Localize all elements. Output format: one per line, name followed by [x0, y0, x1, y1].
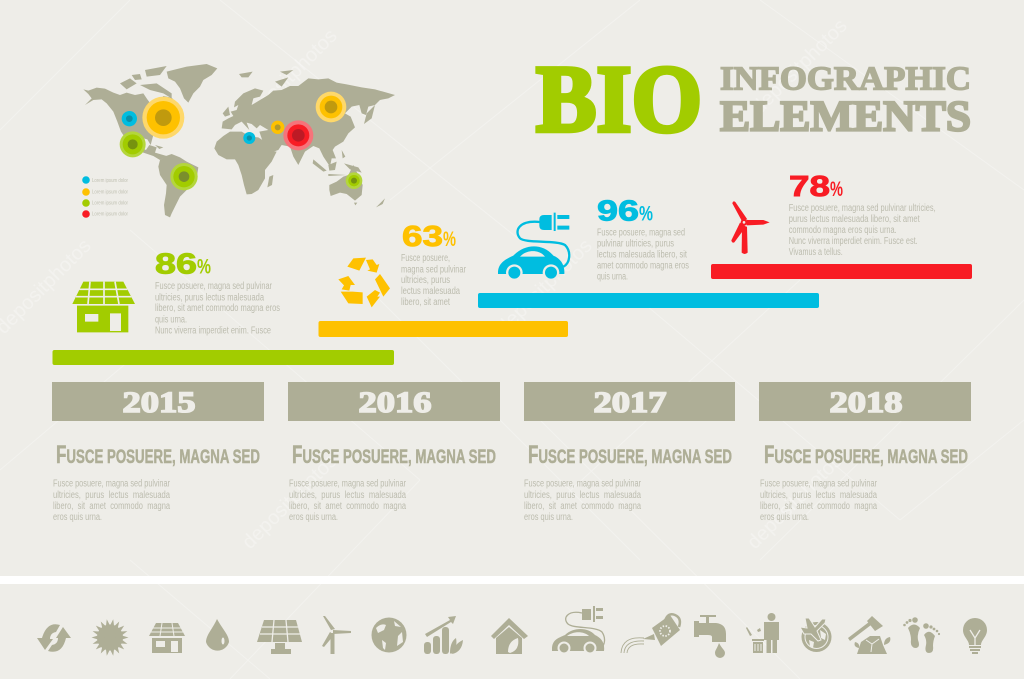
watermark: depositphotos: [748, 15, 852, 119]
icon: solar panel: [257, 620, 302, 654]
watermark: depositphotos: [743, 450, 847, 554]
column 2015: 2015: [122, 386, 196, 419]
title: ELEMENTS: [720, 94, 971, 140]
stat 78%: [789, 171, 936, 258]
stat 86%: 86: [155, 248, 197, 280]
stat 63%: [401, 221, 466, 308]
watermark: depositphotos: [238, 450, 342, 554]
icon: water drop: [206, 619, 229, 651]
icon row: [37, 606, 987, 658]
column 2018: libero, sit amet commodo magna: [760, 501, 877, 512]
stat 96%: %: [639, 202, 653, 226]
icon: footprints: [903, 617, 940, 653]
bubble: yellow Middle East: [271, 121, 284, 134]
column 2016: ultricies, purus lectus malesuada: [289, 490, 406, 501]
column 2017: Fusce posuere, magna sed pulvinar: [524, 478, 641, 490]
white divider band: [0, 576, 1024, 584]
icon: globe: [372, 618, 406, 652]
column 2015: libero, sit amet commodo magna: [53, 501, 170, 512]
step 4: red bar: [711, 264, 972, 279]
column 2015: FUSCE POSUERE, MAGNA SED: [56, 441, 260, 469]
watermark: depositphotos: [238, 25, 342, 129]
icon: wind turbine: [322, 616, 351, 654]
stat 86%: [155, 248, 280, 336]
icon: growth chart with leaves: [424, 616, 463, 654]
watermark: [0, 15, 852, 554]
column 2015: [52, 382, 264, 523]
column 2016: Fusce posuere, magna sed pulvinar: [289, 478, 406, 490]
map legend: [82, 176, 128, 218]
column 2018: ultricies, purus lectus malesuada: [760, 490, 877, 501]
column 2016: 2016: [358, 386, 432, 419]
bubble: green Australia: [346, 172, 362, 189]
stat 96%: pulvinar ultricies, purus: [597, 238, 674, 250]
column 2016: libero, sit amet commodo magna: [289, 501, 406, 512]
stat 78%: Nunc viverra imperdiet enim. Fusce est.: [789, 236, 918, 247]
icon: water tap: [694, 615, 726, 658]
stat 96%: lectus malesuada libero, sit: [597, 250, 687, 260]
column 2015: ultricies, purus lectus malesuada: [53, 490, 170, 501]
title: [536, 46, 971, 152]
step 2: yellow bar: [318, 321, 568, 337]
column 2017: ultricies, purus lectus malesuada: [524, 490, 641, 501]
title: INFOGRAPHIC: [720, 60, 971, 98]
stat 78%: purus lectus malesuada libero, sit amet: [789, 214, 920, 225]
step 3: blue bar: [478, 293, 819, 308]
stat 63%: libero, sit amet: [401, 297, 450, 308]
map legend: Lorem ipsum dolor: [92, 178, 128, 184]
column 2018: Fusce posuere, magna sed pulvinar: [760, 478, 877, 490]
stat 63%: lectus malesuada: [401, 286, 460, 297]
stat 86%: Fusce posuere, magna sed pulvinar: [155, 281, 272, 292]
column 2015: eros quis urna.: [53, 512, 102, 523]
stat 86%: libero, sit amet commodo magna eros: [155, 303, 280, 314]
icon: red wind turbine: [731, 201, 770, 254]
bubble: blue west USA: [122, 111, 137, 126]
icon: electric car small: [552, 606, 605, 654]
stat 96%: quis urna.: [597, 272, 628, 282]
stat 63%: %: [443, 228, 456, 251]
bubble: large yellow USA: [142, 97, 184, 139]
bubble: red India: [283, 120, 313, 150]
step 1: green bar: [52, 350, 394, 365]
map landmasses: [83, 64, 395, 217]
stat 63%: magna sed pulvinar: [401, 264, 466, 276]
stat 63%: ultricies, purus: [401, 275, 450, 286]
column 2018: 2018: [830, 386, 902, 419]
icon: person and bin: [746, 613, 779, 653]
stat 63%: Fusce posuere,: [401, 253, 450, 264]
stat 86%: ultricies, purus lectus malesuada: [155, 292, 264, 304]
icon: house with solar roof: [149, 623, 185, 653]
stat 63%: 63: [402, 221, 443, 253]
column 2017: eros quis urna.: [524, 512, 573, 523]
world map with data bubbles: [83, 64, 395, 217]
icon: axe and stump: [848, 616, 890, 654]
column 2015: Fusce posuere, magna sed pulvinar: [53, 478, 170, 490]
stat 78%: commodo magna eros quis urna.: [789, 225, 897, 236]
icon: recycle: [338, 258, 390, 307]
icon: eco home: [491, 618, 528, 654]
icon: solar house: [72, 282, 135, 332]
stat 86%: %: [197, 256, 211, 278]
watermark: depositphotos: [493, 235, 597, 339]
icon: plane and globe: [800, 618, 832, 652]
stat 96%: amet commodo magna eros: [597, 260, 689, 272]
stat 86%: Nunc viverra imperdiet enim. Fusce: [155, 326, 271, 336]
bubble: yellow China: [316, 92, 346, 122]
bubble: green Brazil: [170, 163, 198, 190]
column 2016: [288, 382, 500, 523]
map legend: Lorem ipsum dolor: [92, 190, 128, 196]
stat 78%: %: [830, 178, 843, 201]
icon: light bulb: [963, 618, 987, 654]
stat 78%: 78: [789, 171, 830, 203]
bubble: blue Africa: [243, 132, 255, 144]
stat 96%: Fusce posuere, magna sed: [597, 228, 685, 238]
map legend: Lorem ipsum dolor: [92, 200, 128, 206]
column 2016: eros quis urna.: [289, 512, 338, 523]
icon: electric car with plug: [498, 213, 569, 281]
map legend: Lorem ipsum dolor: [92, 212, 128, 218]
icon: recycle arrows: [37, 624, 71, 652]
title: BIO: [536, 46, 702, 152]
column 2017: FUSCE POSUERE, MAGNA SED: [528, 441, 732, 469]
icon: sun: [92, 619, 128, 656]
stat 96%: 96: [597, 196, 639, 228]
stat 86%: quis urna.: [155, 314, 187, 326]
bubble: green Mexico: [120, 131, 146, 157]
stat 78%: Fusce posuere, magna sed pulvinar ultricies,: [789, 203, 936, 214]
stat 78%: Vivamus a tellus.: [789, 247, 843, 258]
stat 96%: [597, 196, 689, 282]
column 2017: libero, sit amet commodo magna: [524, 501, 641, 512]
column 2017: 2017: [594, 386, 666, 419]
column 2018: eros quis urna.: [760, 512, 809, 523]
icon: watering can: [621, 614, 680, 653]
column 2018: [759, 382, 971, 523]
column 2017: [524, 382, 735, 523]
column 2016: FUSCE POSUERE, MAGNA SED: [292, 441, 496, 469]
